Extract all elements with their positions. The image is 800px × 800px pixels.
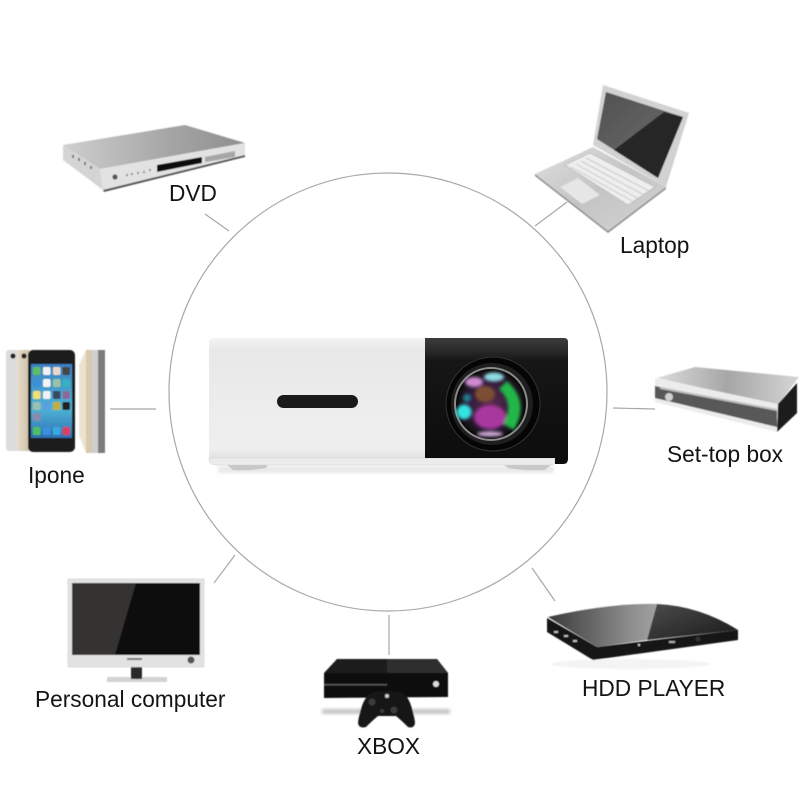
player reflection [550, 659, 710, 669]
projector [209, 338, 568, 473]
label: Ipone: Ipone [28, 462, 85, 488]
box front [655, 378, 778, 432]
gold phone rear [17, 350, 31, 451]
silver phone rear [6, 350, 20, 451]
label: Set-top box: Set-top box [667, 441, 784, 467]
label: XBOX: XBOX [357, 733, 420, 759]
projector black body [425, 338, 568, 464]
laptop base [535, 147, 666, 231]
box front light stripe [660, 387, 777, 411]
connector: set-top box [613, 408, 655, 409]
label: Laptop: Laptop [620, 232, 689, 258]
laptop trackpad [560, 178, 600, 204]
projector white body [209, 338, 425, 458]
box top [657, 367, 799, 405]
box power button [665, 393, 673, 401]
connector: Xbox [388, 615, 390, 655]
player top left [548, 604, 657, 647]
DVD front [100, 143, 245, 190]
projector feet [226, 464, 552, 470]
label: DVD: DVD [169, 180, 217, 206]
device: HDD player [547, 604, 738, 669]
laptop keys [571, 158, 649, 202]
DVD knob [112, 174, 118, 180]
DVD top face [63, 125, 245, 169]
box side [777, 383, 797, 432]
device: iPhone group [6, 350, 105, 453]
laptop base front edge [535, 174, 666, 233]
monitor neck [131, 665, 142, 679]
central circle [169, 173, 607, 611]
device: monitor [68, 579, 204, 682]
DVD left side [63, 145, 103, 190]
projector shadow [218, 466, 554, 473]
monitor screen [72, 583, 200, 655]
device: Xbox [322, 659, 450, 727]
device: DVD player [63, 125, 245, 192]
console top [324, 659, 448, 673]
screen reflection [72, 583, 136, 655]
DVD buttons [126, 169, 151, 176]
disc slot [324, 684, 387, 686]
laptop lid [593, 85, 689, 187]
monitor frame [68, 579, 204, 667]
USB ports [554, 631, 577, 642]
player top right [647, 604, 738, 640]
box front dark band [655, 386, 777, 427]
DVD bottom edge [103, 155, 245, 192]
laptop screen [597, 92, 683, 178]
laptop screen reflection [614, 112, 683, 178]
player front [547, 618, 738, 660]
connector: iPhone [110, 408, 156, 410]
console front [324, 673, 448, 698]
DVD left ports [72, 155, 92, 169]
DVD display [157, 157, 202, 172]
console top right panel [387, 659, 448, 673]
label: HDD PLAYER: HDD PLAYER [582, 675, 725, 701]
monitor brand [127, 658, 142, 660]
console logo [433, 681, 439, 687]
monitor stand base [107, 677, 167, 682]
controller [358, 691, 415, 727]
lens [446, 357, 540, 451]
connector: laptop [535, 202, 567, 226]
controller logo [385, 694, 389, 698]
connector: HDD player [532, 568, 555, 601]
console shadow [322, 709, 450, 714]
device: set-top box [655, 367, 799, 432]
connector: DVD [205, 214, 229, 231]
app icons [33, 367, 70, 435]
side-view phones [79, 350, 105, 453]
connector: personal computer [214, 555, 235, 583]
controller sticks [368, 698, 398, 714]
camera dots [10, 353, 27, 359]
monitor button [188, 656, 194, 664]
DVD panel [205, 151, 235, 162]
player details [638, 636, 700, 646]
vent slot [277, 395, 358, 408]
laptop keyboard [565, 153, 655, 205]
device: laptop [535, 85, 689, 233]
phone front [28, 350, 75, 452]
phone screen [31, 364, 72, 438]
projector base strip [209, 458, 555, 465]
lens reflections [456, 372, 521, 436]
label: Personal computer: Personal computer [35, 686, 226, 712]
